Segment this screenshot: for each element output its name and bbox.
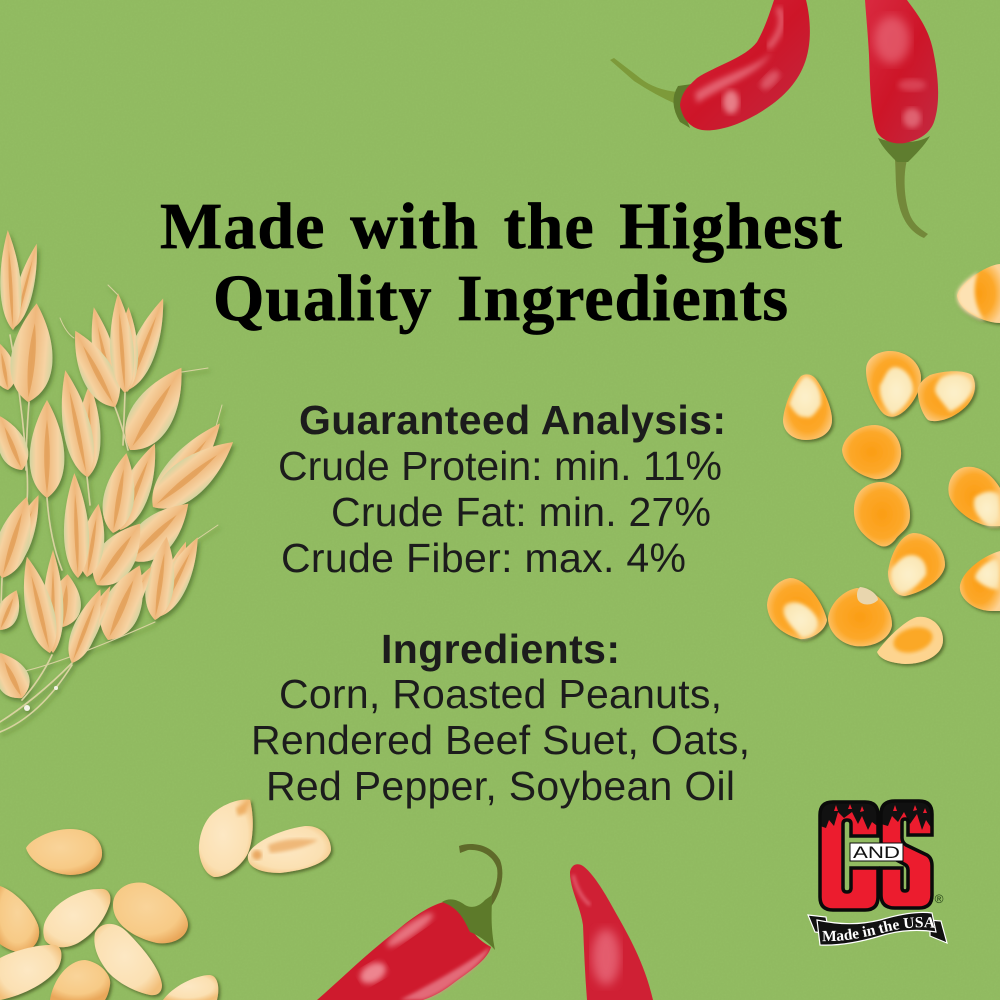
AND box [850, 843, 903, 862]
crude fiber: Crude Fiber: max. 4% [281, 535, 686, 581]
ingredients line 1: Corn, Roasted Peanuts, [279, 671, 722, 717]
heading: guaranteed analysis: Guaranteed Analysis: [299, 397, 726, 443]
illustration: oat sprig [0, 230, 245, 732]
heading: ingredients: Ingredients: [381, 626, 620, 672]
registered mark: ® [935, 892, 944, 906]
title [160, 190, 842, 335]
peanut 7 [94, 924, 162, 995]
kernel 2 [783, 374, 832, 440]
kernel 9 [960, 551, 1000, 611]
peanut 1 [26, 829, 102, 875]
ingredients line 2: Rendered Beef Suet, Oats, [251, 717, 750, 763]
illustration: peanuts [0, 799, 331, 1000]
kernel 3 [866, 351, 921, 417]
text block: guaranteed analysis [278, 397, 726, 581]
kernel 11 [828, 587, 892, 646]
peanut 5 [43, 889, 111, 947]
ingredients line 3: Red Pepper, Soybean Oil [266, 763, 735, 809]
peanut 2 [199, 799, 253, 877]
banner: made in the USA: Made in the USA [822, 917, 934, 942]
AND box: AND [853, 843, 900, 862]
peanut 10 [163, 975, 218, 1000]
kernel 6 [854, 482, 910, 546]
kernel 12 [877, 617, 943, 664]
illustration: chili pepper top left [610, 0, 810, 130]
illustration: chili pepper bottom right [570, 864, 653, 1000]
crude fat: Crude Fat: min. 27% [331, 489, 711, 535]
peanut 6 [0, 886, 39, 952]
peanut 8 [0, 945, 61, 1000]
title: Made with the Highest [160, 190, 842, 263]
kernel 10 [767, 578, 827, 639]
peanut 4 [113, 882, 188, 943]
kernel 4 [918, 371, 975, 421]
letter C [818, 800, 880, 910]
kernel: top right edge [957, 264, 1000, 323]
title: Quality Ingredients [213, 262, 788, 335]
kernel 8 [888, 533, 945, 596]
illustration: chili pepper top right [865, 0, 938, 238]
peanut 9 [50, 960, 110, 1000]
kernel 7 [948, 467, 1000, 526]
crude protein: Crude Protein: min. 11% [278, 443, 722, 489]
kernel 5 [842, 425, 901, 479]
illustration: corn kernels [767, 264, 1000, 664]
letter S [880, 800, 934, 908]
text block: ingredients [251, 626, 750, 809]
peanut 3 [248, 826, 331, 873]
illustration: chili pepper bottom left [317, 844, 502, 1000]
logo: C and S [807, 799, 948, 946]
